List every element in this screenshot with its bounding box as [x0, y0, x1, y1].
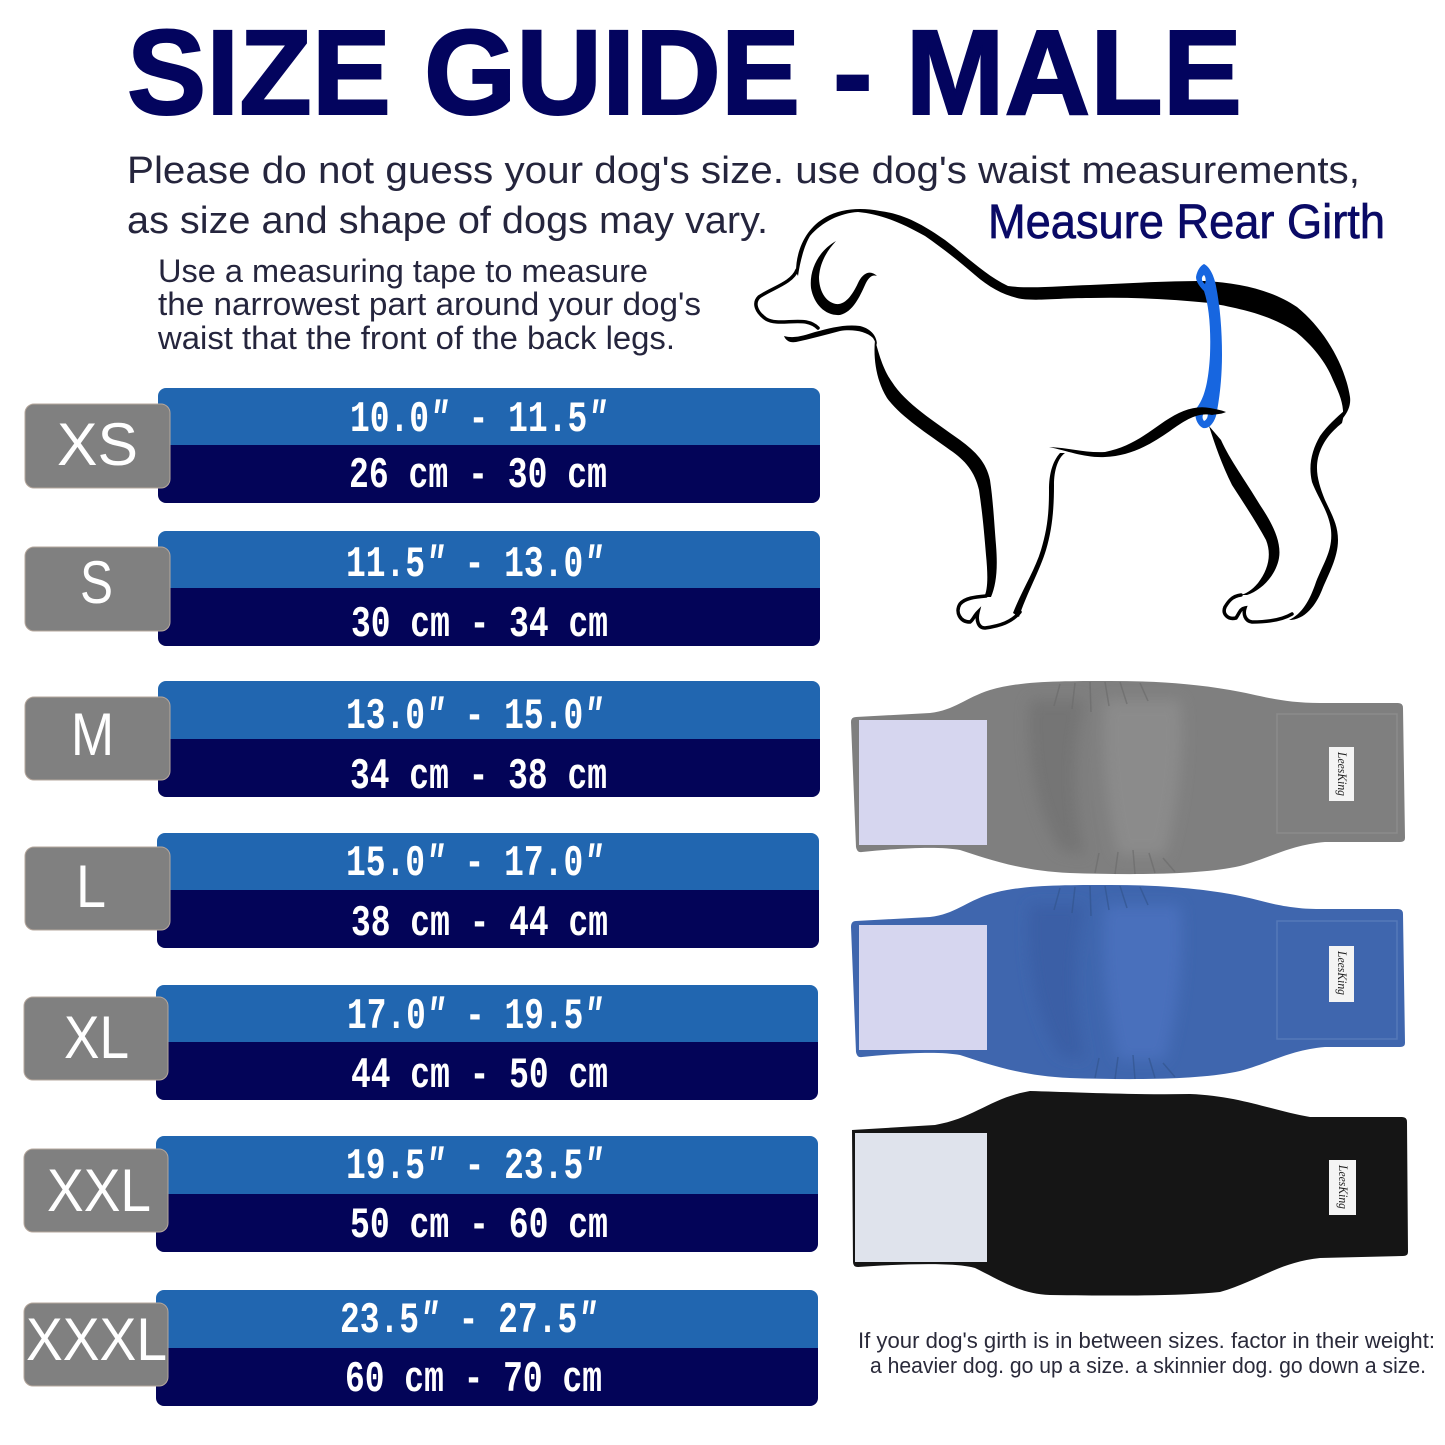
size row L: [25, 833, 819, 949]
belly line: [1049, 407, 1226, 457]
velcro patch: [859, 925, 987, 1050]
size tag: XS: [57, 411, 138, 478]
brand label: LeesKing: [1335, 751, 1350, 796]
elastic gathers: [1054, 886, 1175, 1079]
size row S: [25, 531, 820, 650]
size tag: XXXL: [26, 1306, 167, 1373]
size tag: [25, 697, 170, 780]
range bar: [156, 985, 818, 1101]
size tag: [25, 847, 170, 930]
brand label: [1329, 1160, 1356, 1215]
range bar: 11.5″ - 13.0″: [346, 540, 603, 590]
size tag: [25, 404, 170, 488]
brand label: LeesKing: [1336, 1164, 1351, 1209]
product: grey belly band: [851, 681, 1405, 874]
size row M: [25, 681, 820, 802]
size tag: L: [76, 853, 106, 920]
brand label: [1329, 747, 1354, 801]
ear: [811, 241, 877, 315]
measuring instructions: waist that the front of the back legs.: [157, 320, 675, 356]
range bar: [158, 388, 820, 503]
size row XXXL: [24, 1290, 818, 1406]
chin and neck: [784, 325, 877, 345]
size tag: S: [80, 549, 113, 616]
measuring instructions: the narrowest part around your dog's: [158, 286, 701, 322]
stitched pocket: [1277, 921, 1397, 1039]
range bar: 13.0″ - 15.0″: [346, 692, 603, 742]
product: black belly band: [852, 1091, 1408, 1296]
sizing note: a heavier dog. go up a size. a skinnier dog. go down a size.: [870, 1353, 1426, 1378]
brand label: LeesKing: [1335, 950, 1350, 995]
brand label: [1329, 946, 1354, 1002]
fabric shading: [1029, 700, 1182, 855]
range bar: 15.0″ - 17.0″: [346, 839, 603, 889]
measuring instructions: [157, 253, 701, 356]
snout: [756, 270, 818, 328]
size tag: M: [71, 701, 114, 768]
rear leg: [1209, 426, 1279, 595]
range bar: 44 cm - 50 cm: [351, 1051, 608, 1101]
back and rump line: [796, 209, 1350, 418]
range bar: [156, 1290, 818, 1406]
fabric shading: [1029, 905, 1182, 1060]
sizing note: If your dog's girth is in between sizes. factor in their weight:: [858, 1328, 1435, 1353]
blue girth ring: [1195, 264, 1222, 428]
velcro patch: [859, 720, 987, 845]
velcro patch: [855, 1133, 987, 1262]
size row XXL: [24, 1136, 818, 1252]
range bar: [158, 531, 820, 650]
range bar: [157, 833, 819, 949]
range bar: [156, 1136, 818, 1252]
intro text: [127, 150, 1360, 242]
stitched pocket: [1277, 714, 1397, 833]
range bar: 38 cm - 44 cm: [351, 899, 608, 949]
intro text: Please do not guess your dog's size. use dog's waist measurements,: [127, 150, 1360, 192]
range bar: 60 cm - 70 cm: [345, 1355, 602, 1405]
size row XL: [24, 985, 818, 1101]
range bar: 50 cm - 60 cm: [350, 1201, 608, 1251]
sizing note: [858, 1328, 1435, 1378]
range bar: [158, 681, 820, 802]
range bar: 23.5″ - 27.5″: [340, 1296, 597, 1346]
size tag: XL: [64, 1004, 129, 1071]
size tag: [24, 1149, 168, 1232]
size row XS: [25, 388, 820, 503]
intro text: as size and shape of dogs may vary.: [127, 200, 768, 242]
size tag: XXL: [47, 1157, 151, 1224]
range bar: 17.0″ - 19.5″: [347, 992, 603, 1042]
chest and front leg: [874, 340, 997, 597]
range bar: 26 cm - 30 cm: [349, 451, 607, 501]
product: blue belly band: [851, 885, 1405, 1079]
size tag: [24, 997, 168, 1080]
heading: measure rear girth: Measure Rear Girth: [988, 196, 1385, 249]
elastic gathers: [1054, 682, 1175, 874]
size tag: [25, 547, 170, 631]
measuring instructions: Use a measuring tape to measure: [158, 253, 648, 289]
range bar: 19.5″ - 23.5″: [346, 1142, 603, 1192]
range bar: 10.0″ - 11.5″: [350, 395, 607, 445]
range bar: 30 cm - 34 cm: [351, 600, 608, 650]
title: SIZE GUIDE - MALE: [127, 4, 1242, 140]
range bar: 34 cm - 38 cm: [350, 752, 607, 802]
dog outline illustration: [756, 209, 1350, 628]
